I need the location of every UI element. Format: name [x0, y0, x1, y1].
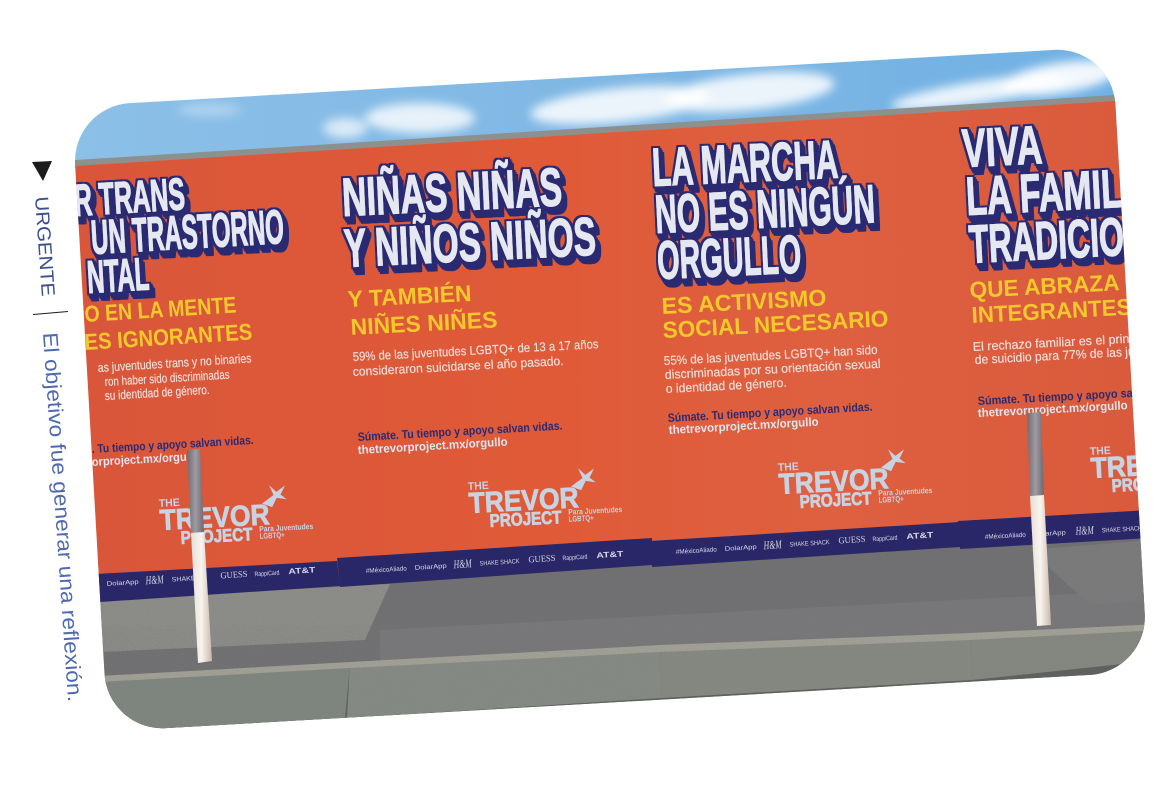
poster 4 call to action: thetrevorproject.mx/orgullo: [977, 398, 1128, 420]
right pavement: [1144, 592, 1145, 626]
poster 3 subhead: [662, 290, 888, 338]
poster 1 sponsors: SHAKE: [171, 575, 197, 584]
poster 1 headline: NTAL: [86, 248, 150, 303]
poster 3 logo: [778, 449, 932, 508]
poster 4 sponsors: DolarApp: [1034, 529, 1066, 538]
poster 4 body: [974, 334, 1130, 364]
poster 4 subhead: [970, 274, 1128, 323]
poster 1: [72, 168, 316, 590]
poster 2 sponsors: DolarApp: [415, 563, 447, 572]
wall top rail: [60, 94, 1130, 167]
poster 2 logo: TREVOR: [468, 482, 579, 520]
poster 3 body: [664, 345, 880, 393]
poster 4 logo: [1090, 446, 1138, 492]
poster 1 sponsors: DolarApp: [107, 579, 139, 588]
poster 2 headline: [341, 157, 597, 279]
poster 2 logo: Para Juventudes: [568, 505, 623, 517]
poster 1 logo: THE: [159, 497, 180, 510]
poster 2 logo: PROJECT: [489, 507, 562, 531]
poster 1 subhead: ES IGNORANTES: [84, 318, 253, 355]
poster 1 sponsors: H&M: [145, 572, 165, 587]
poster 3 sponsors: H&M: [763, 537, 783, 552]
poster 2 body: 59% de las juventudes LGBTQ+ de 13 a 17 años: [352, 337, 599, 364]
photo card: [75, 50, 1145, 728]
poster 1 body: as juventudes trans y no binaries: [97, 351, 252, 375]
poster 1 body: [97, 351, 252, 403]
light pavement patch: [95, 584, 390, 652]
poster 2 headline: Y NIÑOS NIÑOS: [343, 207, 597, 279]
sponsor bands: [95, 510, 1150, 602]
side divider: [33, 311, 68, 315]
poster 3 body: 55% de las juventudes LGBTQ+ han sido: [663, 343, 878, 368]
poster 1 logo: LGBTQ+: [259, 530, 285, 541]
poster 4 logo: THE: [1090, 445, 1111, 458]
poster 4 headline: VIVA: [961, 115, 1043, 179]
poster 3 sponsors: GUESS: [838, 534, 866, 545]
pole right: [1027, 412, 1051, 626]
poster 3 headline: [651, 130, 876, 291]
poster 3 headline: ORGULLO: [656, 225, 802, 291]
poster 3 call to action: thetrevorproject.mx/orgullo: [668, 415, 819, 437]
pole left: [187, 449, 212, 663]
poster 2 logo: THE: [468, 480, 489, 493]
poster 2 sponsors: AT&T: [596, 549, 624, 560]
poster 1 call to action: . Tu tiempo y apoyo salvan vidas.: [91, 433, 254, 456]
poster 3 sponsors: RappiCard: [872, 535, 898, 543]
poster 1 headline: R TRANS: [72, 168, 186, 226]
poster 2 headline: NIÑAS NIÑAS: [341, 157, 563, 228]
side label: URGENTE: URGENTE: [30, 196, 58, 297]
poster 1 sponsors: [107, 566, 316, 586]
poster 3 logo: THE: [778, 461, 799, 474]
poster 2 logo: [468, 468, 622, 528]
poster 1 call to action: [92, 436, 253, 468]
poster 4 body: El rechazo familiar es el princ: [972, 331, 1136, 354]
poster 2 sponsors: GUESS: [528, 553, 556, 564]
side marker: triangle: [32, 161, 52, 181]
poster 1 logo: Para Juventudes: [259, 522, 314, 534]
poster 2 body: [353, 340, 598, 376]
poster 1 subhead: O EN LA MENTE: [84, 291, 237, 327]
poster 4 sponsors: H&M: [1075, 523, 1095, 538]
poster 2 sponsors: #MéxicoAliado: [366, 565, 407, 575]
poster 4 headline: [961, 115, 1125, 275]
poster 3 sponsors: SHAKE SHACK: [789, 539, 830, 549]
poster 1 subhead: [85, 296, 252, 350]
poster 1 sponsors: AT&T: [288, 565, 316, 576]
poster 4 call to action: [978, 390, 1132, 417]
poster 3 headline: NO ES NINGÚN: [654, 174, 876, 245]
poster 2 call to action: [358, 422, 562, 454]
poster 3 call to action: [668, 402, 872, 434]
poster 4 call to action: Súmate. Tu tiempo y apoyo sal: [977, 386, 1136, 408]
poster 3 call to action: Súmate. Tu tiempo y apoyo salvan vidas.: [667, 400, 873, 425]
ground: [98, 502, 1145, 728]
poster 2 sponsors: H&M: [453, 556, 473, 571]
poster 2 sponsors: [366, 550, 624, 573]
poster 3: [651, 130, 934, 558]
poster 3 sponsors: [676, 532, 934, 554]
poster 1 headline: UN TRASTORNO: [90, 201, 285, 265]
poster 4 body: de suicidio para 77% de las ju: [974, 345, 1135, 367]
poster 4 subhead: QUE ABRAZA: [969, 269, 1120, 303]
poster 1 sponsors: GUESS: [220, 569, 248, 580]
poster 3 subhead: SOCIAL NECESARIO: [662, 305, 889, 343]
poster 1 logo: [158, 485, 313, 544]
poster 1 logo: PROJECT: [180, 524, 253, 548]
poster 2 subhead: Y TAMBIÉN: [347, 279, 472, 312]
orange wall: [60, 99, 1150, 590]
poster 2 logo: LGBTQ+: [568, 513, 594, 524]
poster 2: [341, 157, 624, 577]
poster 3 logo: TREVOR: [778, 463, 889, 501]
poster 1 logo: TREVOR: [159, 499, 270, 537]
poster 2 body: consideraron suicidarse el año pasado.: [352, 354, 564, 379]
curb: [104, 624, 1144, 728]
poster 3 logo: Para Juventudes: [878, 486, 933, 498]
poster 3 sponsors: #MéxicoAliado: [676, 546, 717, 556]
side caption: El objetivo fue generar una reflexión.: [38, 332, 86, 702]
poster 1 headline: [72, 168, 285, 303]
poster 1 body: su identidad de género.: [104, 383, 210, 403]
poster 3 body: discriminadas por su orientación sexual: [664, 357, 881, 382]
poster 2 sponsors: RappiCard: [562, 554, 588, 562]
poster 1 body: ron haber sido discriminadas: [104, 368, 230, 389]
poster 3 body: o identidad de género.: [665, 376, 787, 396]
poster 3 logo: LGBTQ+: [878, 494, 904, 505]
pavement grain: [97, 550, 98, 558]
poster 4 sponsors: #MéxicoAliado: [985, 532, 1026, 541]
poster 4 sponsors: SHAKE SHACK: [1102, 525, 1142, 534]
poster 3 logo: PROJECT: [799, 488, 872, 512]
poster 3 sponsors: AT&T: [906, 530, 934, 541]
sky: [75, 50, 1120, 190]
poster 2 subhead: [348, 282, 497, 335]
poster 2 call to action: thetrevorproject.mx/orgullo: [357, 435, 508, 457]
poster 1 call to action: orproject.mx/orgu: [91, 450, 187, 469]
poster 2 call to action: Súmate. Tu tiempo y apoyo salvan vidas.: [357, 419, 563, 444]
poster 2 subhead: NIÑES NIÑES: [350, 305, 498, 340]
poster 4: [958, 124, 1140, 539]
poster 2 sponsors: SHAKE SHACK: [479, 558, 520, 568]
poster 3 headline: LA MARCHA: [651, 130, 839, 198]
poster 1 sponsors: RappiCard: [254, 570, 280, 578]
poster 3 sponsors: DolarApp: [725, 544, 757, 553]
poster 4 subhead: INTEGRANTES: [971, 294, 1132, 328]
poster 4 sponsors: [984, 526, 1140, 539]
poster 3 subhead: ES ACTIVISMO: [661, 284, 827, 319]
